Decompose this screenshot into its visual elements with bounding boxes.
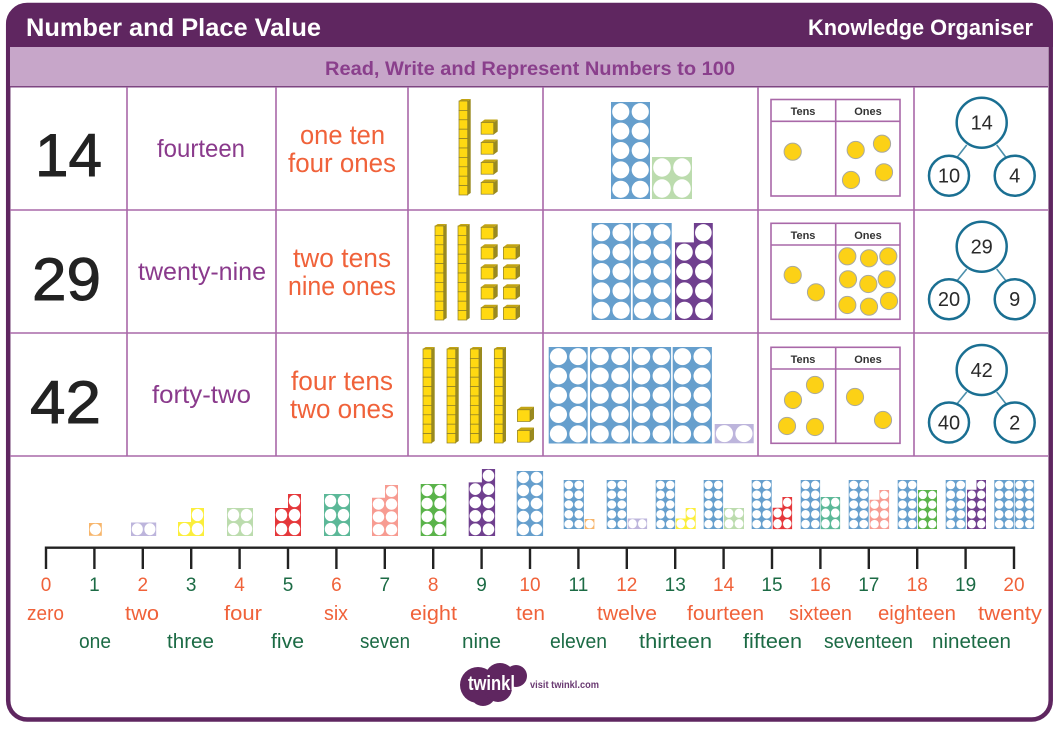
even number words <box>27 603 1042 625</box>
digits: 3 <box>186 575 196 596</box>
number line tiles 1 to 20 <box>89 469 1034 536</box>
logo url: visit twinkl.com <box>530 680 599 691</box>
odd number words: thirteen <box>639 631 712 653</box>
even number words: twelve <box>597 603 657 625</box>
odd number words: one <box>79 631 111 653</box>
numicon tiles <box>549 347 754 444</box>
part-whole model <box>929 345 1035 442</box>
digits: 6 <box>331 575 342 596</box>
even number words: sixteen <box>789 603 852 625</box>
digits: 19 <box>955 575 976 596</box>
digits <box>41 575 1025 596</box>
part-whole model: 29 <box>971 236 993 258</box>
digits: 2 <box>138 575 148 596</box>
tens and ones chart: Tens <box>791 354 815 366</box>
digits: 5 <box>283 575 293 596</box>
odd number words: seven <box>360 631 410 653</box>
even number words: two <box>125 603 159 625</box>
numeral 42: 42 <box>30 369 101 436</box>
partition text: two tens <box>293 243 391 273</box>
digits: 4 <box>234 575 245 596</box>
header bar <box>6 4 1053 47</box>
even number words: eight <box>410 603 457 625</box>
digits: 9 <box>476 575 487 596</box>
odd number words: seventeen <box>824 631 913 653</box>
even number words: eighteen <box>878 603 956 625</box>
tens and ones chart <box>771 347 900 443</box>
part-whole model <box>929 98 1035 196</box>
even number words: fourteen <box>687 603 764 625</box>
row: 42 <box>30 345 1035 444</box>
digits: 15 <box>761 575 783 596</box>
even number words: ten <box>516 603 545 625</box>
tens and ones chart: Ones <box>854 354 882 366</box>
numicon tiles <box>592 223 713 320</box>
subtitle: Read, Write and Represent Numbers to 100 <box>325 59 735 80</box>
partition text <box>288 120 396 178</box>
numicon tiles <box>611 102 692 199</box>
digits: 10 <box>519 575 541 596</box>
odd number words: three <box>167 631 214 653</box>
digits: 18 <box>907 575 928 596</box>
digits: 0 <box>41 575 51 596</box>
part-whole model: 40 <box>938 412 960 434</box>
logo wordmark: twinkl <box>468 673 515 695</box>
tens and ones chart: Tens <box>791 230 815 242</box>
word fourteen: fourteen <box>157 135 245 163</box>
even number words: six <box>324 603 348 625</box>
subtitle band <box>10 47 1048 88</box>
row: 14 <box>35 98 1035 199</box>
odd number words: five <box>271 631 304 653</box>
tens and ones chart: Ones <box>854 106 882 118</box>
part-whole model: 10 <box>938 166 960 188</box>
part-whole model: 20 <box>938 289 960 311</box>
digits: 14 <box>713 575 735 596</box>
numeral 14: 14 <box>35 122 102 189</box>
tens and ones chart: Ones <box>854 230 882 242</box>
numeral 29: 29 <box>32 246 101 313</box>
digits: 7 <box>380 575 390 596</box>
odd number words: fifteen <box>743 631 802 653</box>
partition text: nine ones <box>288 271 396 301</box>
base ten blocks <box>435 224 520 320</box>
digits: 20 <box>1003 575 1025 596</box>
even number words: twenty <box>978 603 1042 625</box>
base ten blocks <box>423 347 534 443</box>
part-whole model: 9 <box>1009 289 1020 311</box>
even number words: four <box>224 603 262 625</box>
partition text <box>288 243 396 301</box>
partition text: four ones <box>288 148 396 178</box>
partition text: four tens <box>291 366 393 396</box>
digits: 13 <box>665 575 686 596</box>
logo cloud <box>460 663 527 706</box>
partition text: one ten <box>300 120 385 150</box>
part-whole model: 4 <box>1009 166 1020 188</box>
part-whole model: 14 <box>971 112 993 134</box>
partition text: two ones <box>290 394 394 424</box>
digits: 12 <box>616 575 637 596</box>
digits: 11 <box>569 575 588 596</box>
twinkl logo <box>460 663 599 706</box>
subject label: Knowledge Organiser <box>808 15 1033 40</box>
digits: 8 <box>428 575 438 596</box>
part-whole model: 42 <box>971 360 993 382</box>
base ten blocks <box>459 99 498 195</box>
word twenty-nine: twenty-nine <box>138 258 266 286</box>
number line <box>27 548 1042 653</box>
word forty-two: forty-two <box>152 381 251 409</box>
tens and ones chart <box>771 100 900 196</box>
odd number words: eleven <box>550 631 607 653</box>
even number words: zero <box>27 603 64 625</box>
tens and ones chart: Tens <box>791 106 815 118</box>
odd number words: nine <box>462 631 501 653</box>
digits: 1 <box>89 575 100 596</box>
digits: 17 <box>858 575 879 596</box>
row: 29 <box>32 222 1035 320</box>
part-whole model <box>929 222 1035 319</box>
tens and ones chart <box>771 223 900 319</box>
title: Number and Place Value <box>26 14 321 42</box>
odd number words: nineteen <box>932 631 1011 653</box>
odd number words <box>79 631 1011 653</box>
part-whole model: 2 <box>1009 412 1020 434</box>
digits: 16 <box>810 575 831 596</box>
partition text <box>290 366 394 424</box>
